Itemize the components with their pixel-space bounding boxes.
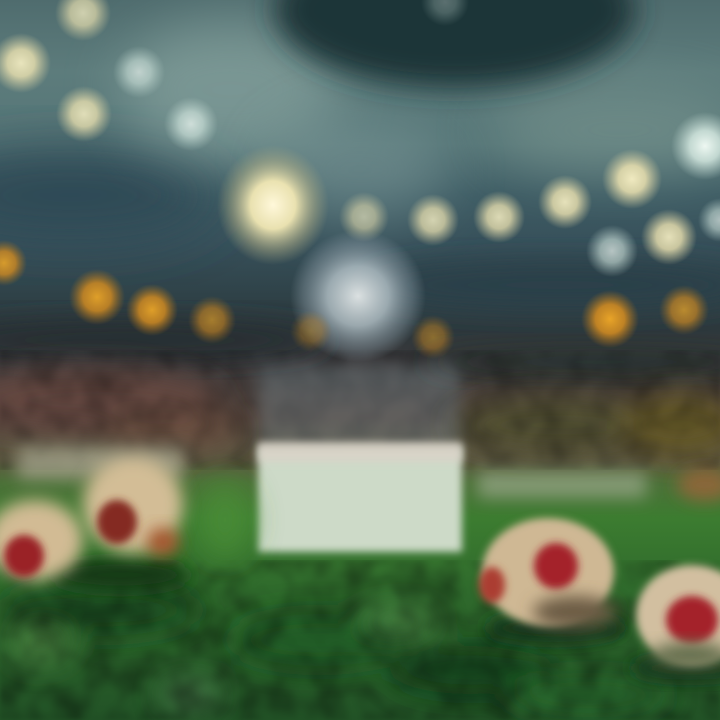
grass mottling (0, 560, 720, 720)
ball: left pair (0, 457, 190, 591)
crowd colour bands (0, 368, 720, 457)
amber lights row (0, 240, 709, 359)
stadium lights: upper rows (0, 0, 720, 277)
central translucent goal panel (258, 365, 462, 552)
stand haze and shadows (0, 20, 720, 376)
dark roof shape (275, 0, 635, 88)
pale glowing orb (290, 230, 426, 362)
ball: far right (630, 565, 720, 680)
large central floodlight (217, 145, 329, 265)
pitch edge boards (18, 447, 720, 501)
crowd mottling (0, 350, 720, 470)
grass texture (0, 480, 670, 713)
ball: right centre (479, 518, 625, 642)
